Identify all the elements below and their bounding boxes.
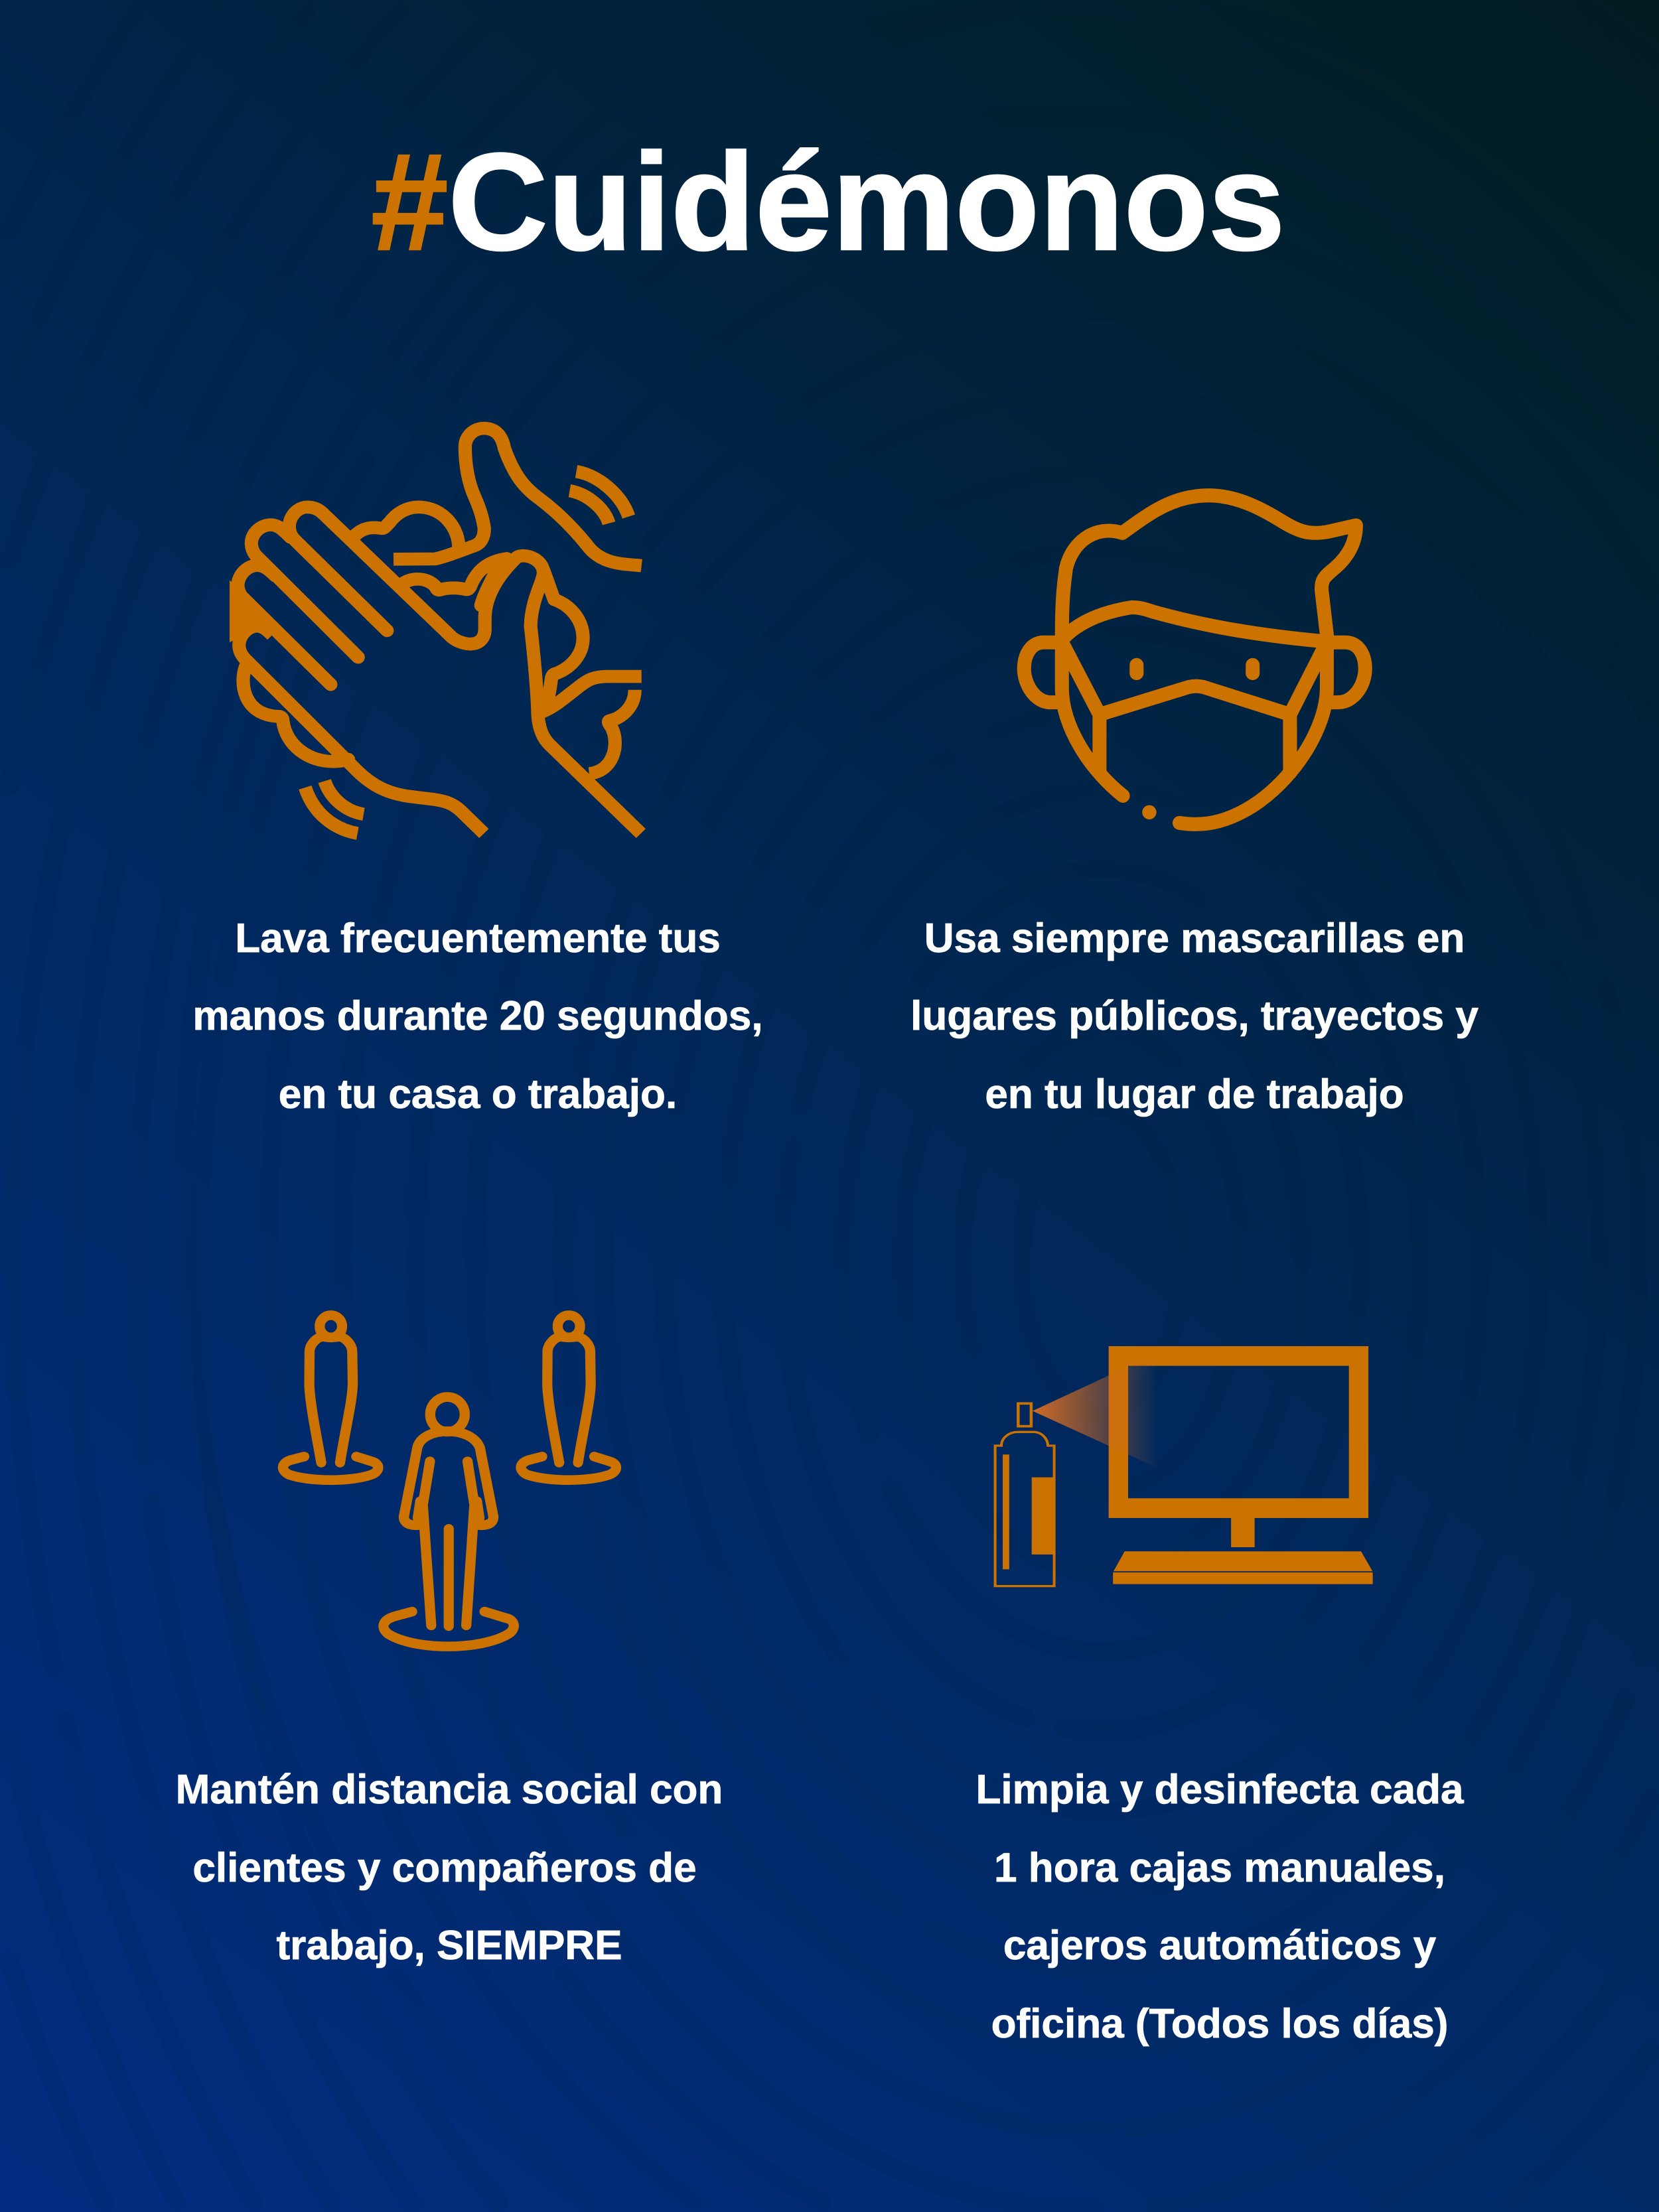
suds top: [354, 507, 459, 549]
right person: [521, 1315, 616, 1480]
suds right: [543, 570, 583, 703]
finger three: [238, 565, 330, 685]
centre person: [384, 1397, 514, 1647]
finger four and lower hand: [239, 626, 484, 833]
text: wash hands: manos durante 20 segundos,: [192, 993, 763, 1039]
icon: three people keeping distance: [283, 1315, 616, 1647]
spray cone: [1033, 1352, 1159, 1468]
text: use masks: Usa siempre mascarillas en: [924, 916, 1465, 961]
text: clean and disinfect: 1 hora cajas manuales,: [994, 1845, 1445, 1891]
text: social distance: trabajo, SIEMPRE: [276, 1923, 622, 1969]
motion waves: [576, 472, 628, 517]
text: use masks: [910, 916, 1479, 1117]
icon: washing hands: [230, 429, 642, 833]
text: social distance: clientes y compañeros de: [192, 1845, 697, 1891]
finger two: [252, 525, 358, 657]
suds lower left: [243, 665, 348, 762]
text: wash hands: [192, 916, 763, 1117]
text: use masks: lugares públicos, trayectos y: [910, 993, 1479, 1039]
text: wash hands: Lava frecuentemente tus: [235, 916, 721, 961]
can details: [1003, 1454, 1009, 1569]
text: clean and disinfect: oficina (Todos los días): [991, 2001, 1448, 2047]
monitor: [1109, 1346, 1368, 1518]
text: clean and disinfect: [975, 1767, 1464, 2047]
lower right wrist line: [549, 744, 641, 833]
text: clean and disinfect: Limpia y desinfecta cada: [975, 1767, 1464, 1813]
spray can outline: [995, 1432, 1054, 1586]
title: #Cuidémonos: [371, 125, 1285, 279]
text: use masks: en tu lugar de trabajo: [985, 1071, 1404, 1117]
finger one: [289, 507, 549, 744]
suds middle: [403, 559, 507, 590]
left person: [283, 1315, 378, 1480]
text: wash hands: en tu casa o trabajo.: [279, 1071, 677, 1117]
icon: face with mask: [1024, 496, 1365, 824]
keyboard: [1114, 1551, 1372, 1571]
icon: spray disinfecting computer: [995, 1346, 1373, 1586]
text: social distance: Mantén distancia social con: [176, 1767, 723, 1813]
upper thumb and hand: [394, 429, 642, 566]
text: social distance: [176, 1767, 723, 1969]
text: clean and disinfect: cajeros automáticos y: [1003, 1923, 1437, 1969]
